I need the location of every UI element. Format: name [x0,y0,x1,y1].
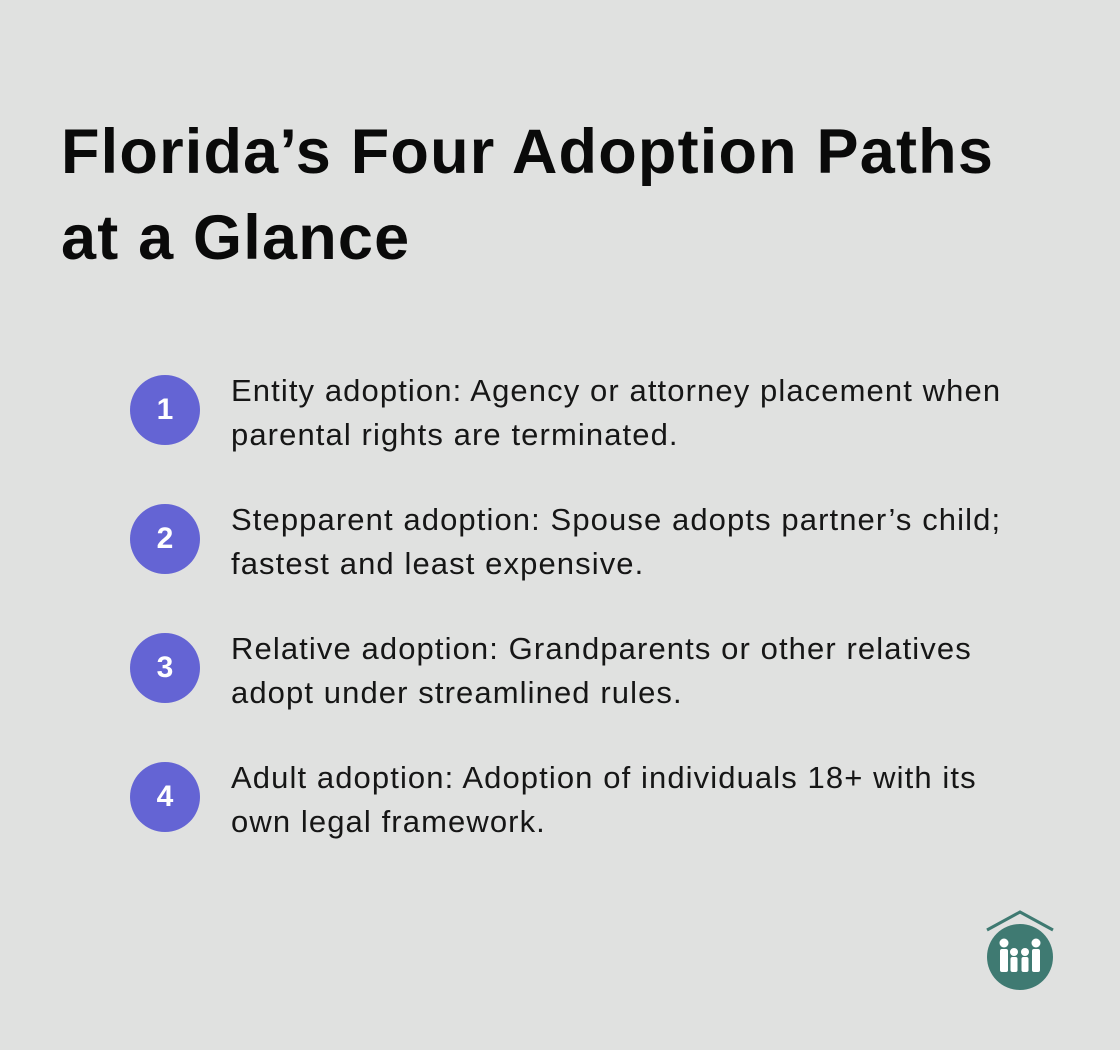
text 4 [231,760,977,839]
title: Florida’s Four Adoption Paths [61,117,994,187]
badge 3: 3 [157,651,173,684]
text 2: Stepparent adoption: Spouse adopts partner’s child; [231,502,1001,537]
icon: logo [986,910,1054,990]
text 4: own legal framework. [231,804,546,839]
badge 4: 4 [157,780,173,813]
badge 2 [130,504,200,574]
badge 1: 1 [157,393,173,426]
item 3 [130,631,972,710]
badge 2: 2 [157,522,173,555]
badge 1 [130,375,200,445]
badge 4 [130,762,200,832]
badge 3 [130,633,200,703]
text 4: Adult adoption: Adoption of individuals 18+ with its [231,760,977,795]
text 3: Relative adoption: Grandparents or other relatives [231,631,972,666]
text 3: adopt under streamlined rules. [231,675,683,710]
text 1 [231,373,1001,452]
text 3 [231,631,972,710]
text 1: Entity adoption: Agency or attorney placement when [231,373,1001,408]
item 2 [130,502,1001,581]
text 2 [231,502,1001,581]
item 1 [130,373,1001,452]
title: at a Glance [61,203,410,273]
text 1: parental rights are terminated. [231,417,679,452]
title [61,117,994,273]
text 2: fastest and least expensive. [231,546,644,581]
item 4 [130,760,977,839]
